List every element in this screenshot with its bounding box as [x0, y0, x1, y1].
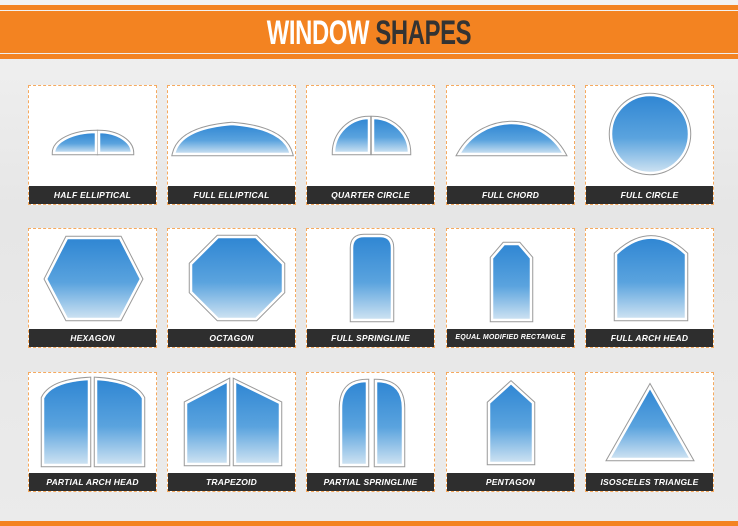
header band	[0, 5, 738, 59]
card: half elliptical	[28, 85, 157, 205]
card: equal modified rectangle: EQUAL MODIFIED RECTANGLE	[455, 334, 566, 341]
card: isosceles triangle	[585, 372, 714, 492]
card: partial springline	[306, 372, 435, 492]
card: full circle	[585, 85, 714, 205]
card: full arch head: FULL ARCH HEAD	[611, 333, 688, 343]
card: partial arch head	[28, 372, 157, 492]
card: quarter circle: QUARTER CIRCLE	[331, 190, 410, 200]
title: WINDOW SHAPES	[267, 14, 471, 52]
card: half elliptical: HALF ELLIPTICAL	[54, 190, 131, 200]
card: partial arch head: PARTIAL ARCH HEAD	[46, 477, 139, 487]
card: full arch head	[585, 228, 714, 348]
card: equal modified rectangle	[446, 228, 575, 348]
card: pentagon	[446, 372, 575, 492]
card: full springline	[306, 228, 435, 348]
card: partial springline: PARTIAL SPRINGLINE	[324, 477, 417, 487]
bottom band	[0, 521, 738, 526]
card: full chord: FULL CHORD	[482, 190, 539, 200]
card: full chord	[446, 85, 575, 205]
card: octagon	[167, 228, 296, 348]
card: octagon: OCTAGON	[209, 333, 254, 343]
card: trapezoid	[167, 372, 296, 492]
card: isosceles triangle: ISOSCELES TRIANGLE	[600, 477, 699, 487]
card: hexagon	[28, 228, 157, 348]
card: full elliptical: FULL ELLIPTICAL	[193, 190, 270, 200]
card: trapezoid: TRAPEZOID	[206, 477, 257, 487]
card: full elliptical	[167, 85, 296, 205]
card: pentagon: PENTAGON	[486, 477, 535, 487]
card: full circle: FULL CIRCLE	[621, 190, 678, 200]
card: hexagon: HEXAGON	[70, 333, 115, 343]
card: quarter circle	[306, 85, 435, 205]
card: full springline: FULL SPRINGLINE	[331, 333, 410, 343]
